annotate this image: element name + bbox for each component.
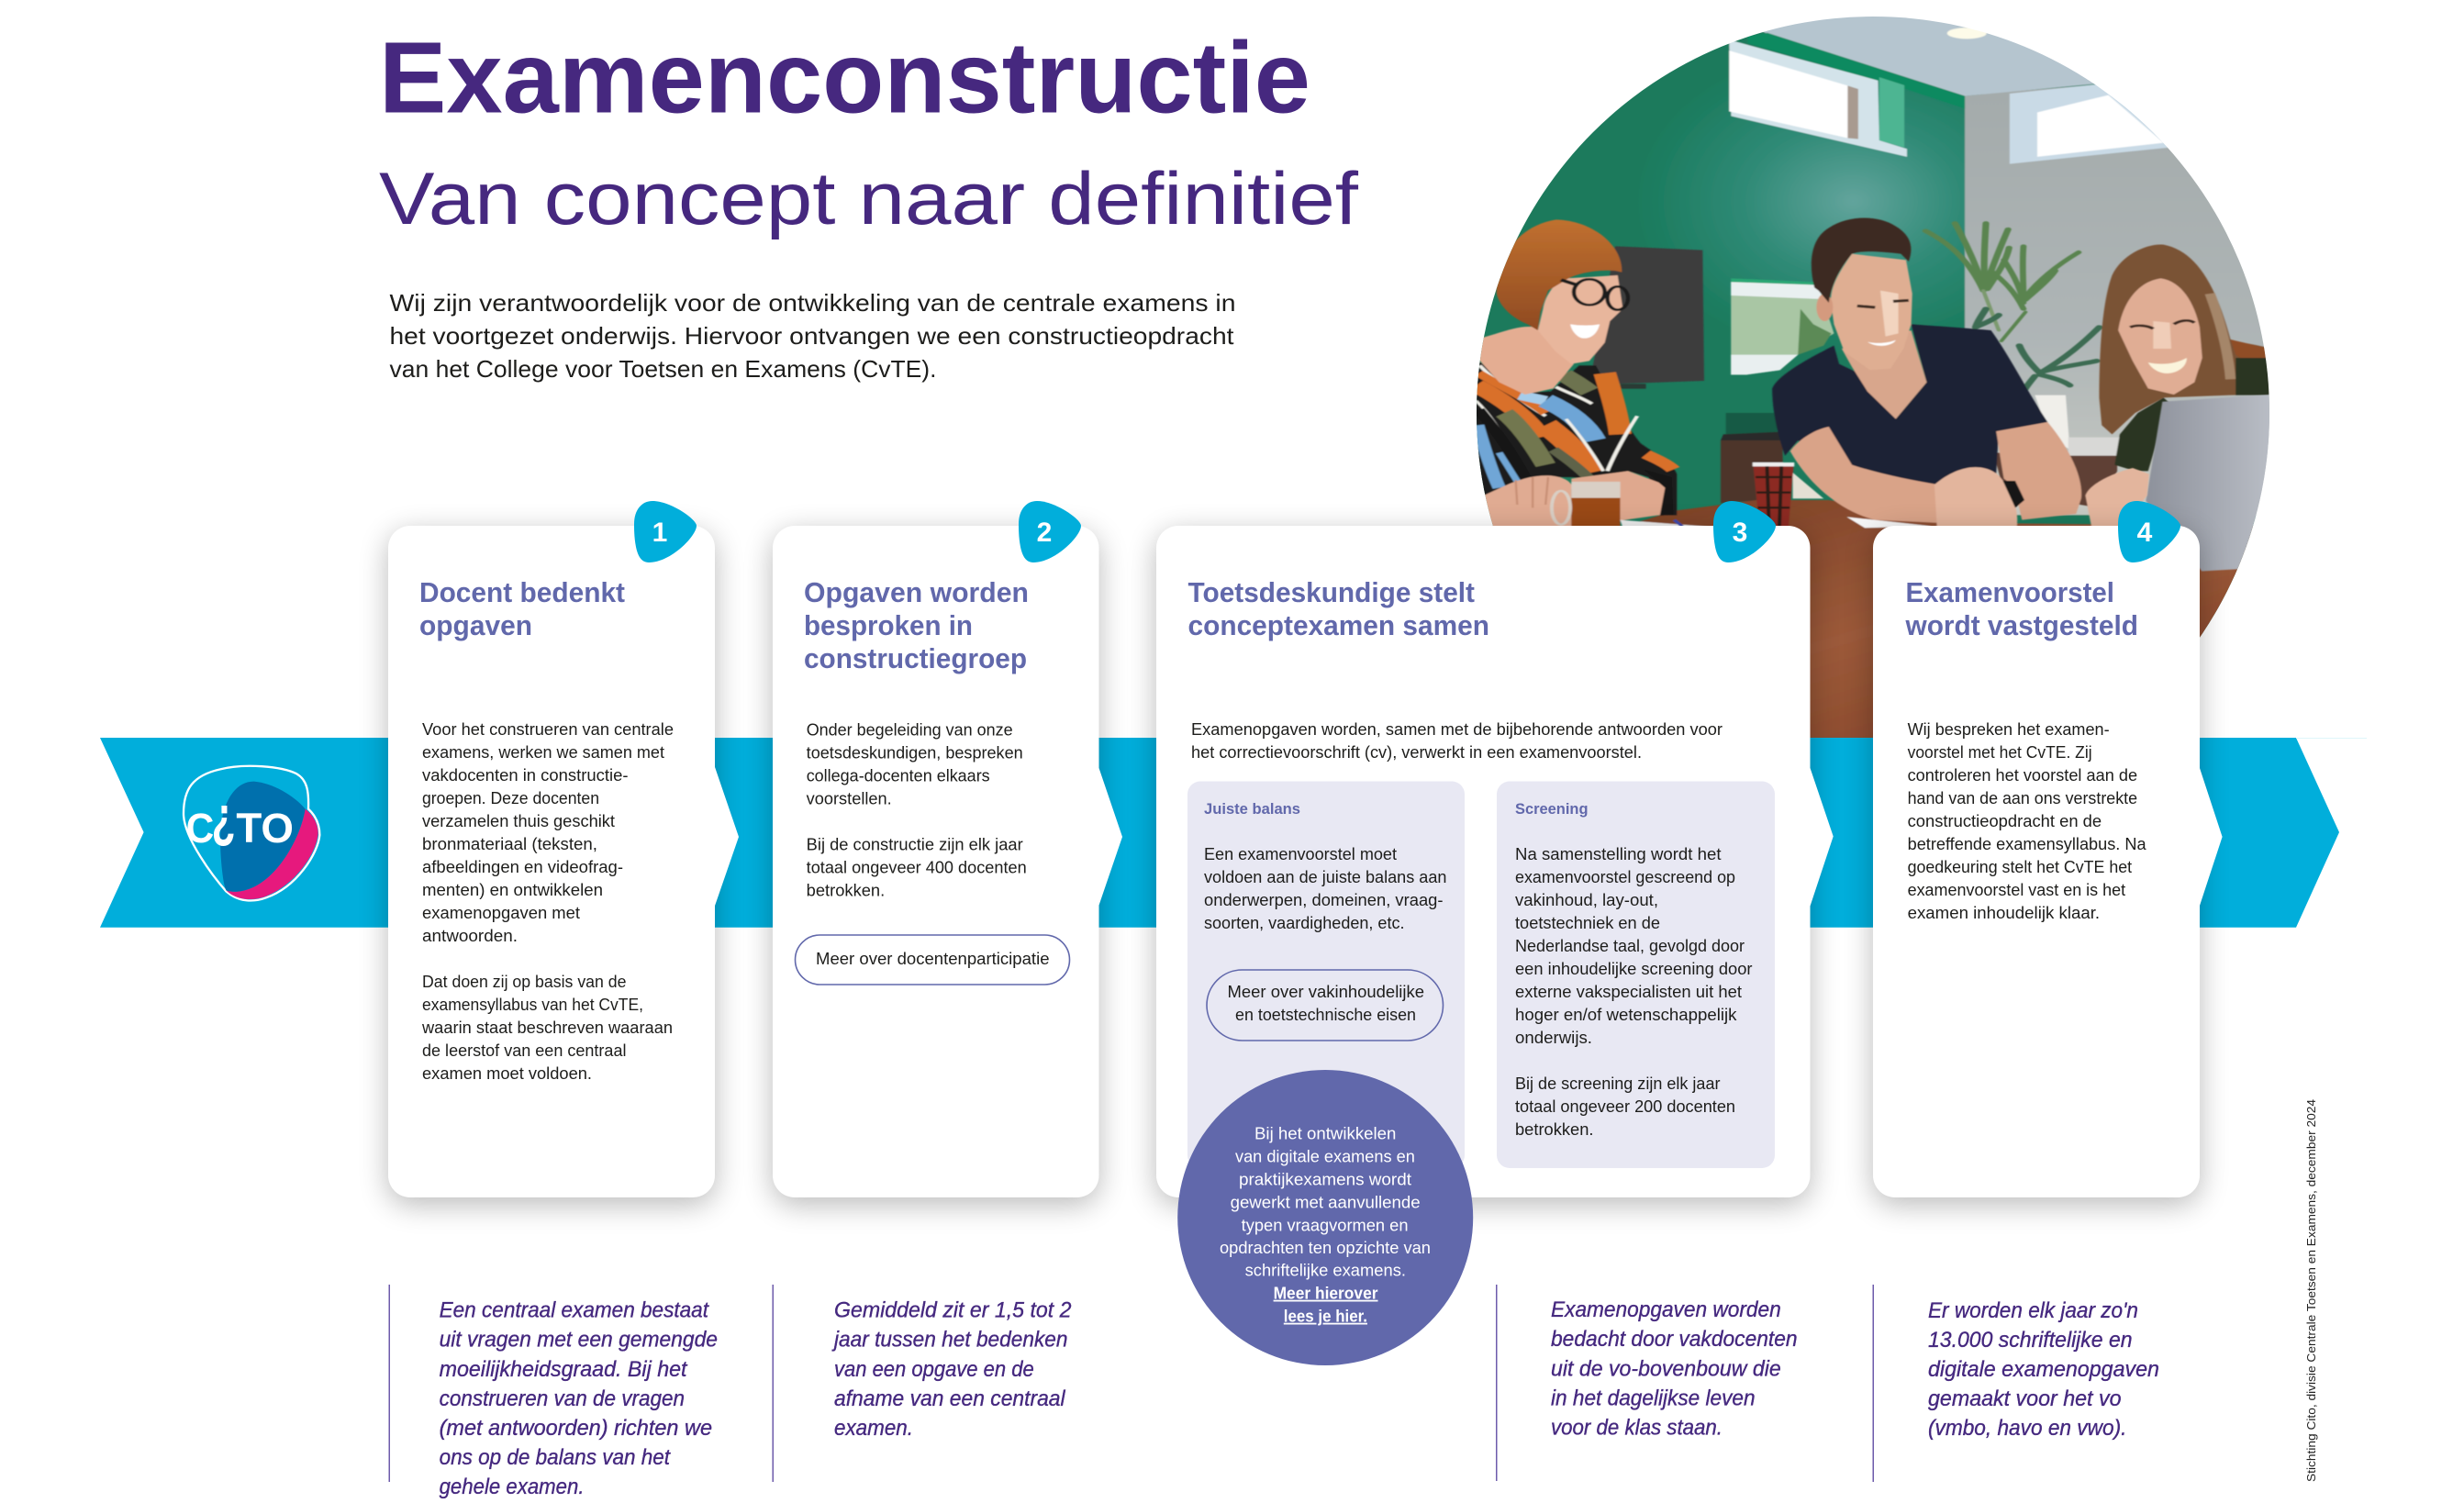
sub-panel: juiste balans: voldoen aan de juiste balans aan: [1204, 868, 1446, 886]
callout 1: een centraal examen: (met antwoorden) richten we: [440, 1416, 712, 1441]
panel: card 1, docent bedenkt opgaven: [388, 501, 739, 1205]
sub-panel: screening: Nederlandse taal, gevolgd door: [1515, 937, 1745, 955]
subtitle: Van concept naar definitief: [379, 158, 1359, 240]
callout circle: digitale examens: Bij het ontwikkelen: [1254, 1125, 1396, 1143]
button: meer over vakinhoudelijke en toetstechnische eisen: en toetstechnische eisen: [1235, 1006, 1416, 1024]
logo: Cito: ¿: [212, 785, 236, 850]
panel: card 3, toetsdeskundige stelt conceptexamen samen: [1156, 501, 1834, 1205]
callout 4: 13.000 schriftelijke en digitale examenopgaven: Er worden elk jaar zo'n: [1928, 1298, 2138, 1323]
callout 1: een centraal examen: uit vragen met een gemengde: [440, 1328, 718, 1353]
sub-panel: screening: [1497, 782, 1775, 1168]
callout circle: digitale examens: typen vraagvormen en: [1242, 1217, 1408, 1235]
heading card 1: Docent bedenkt: [419, 576, 625, 608]
body text card 1: Voor het construeren van centrale: [422, 720, 674, 739]
body text card 4: examenvoorstel vast en is het: [1908, 881, 2125, 899]
callout 3: vakdocenten vo-bovenbouw: bedacht door vakdocenten: [1551, 1327, 1798, 1352]
badge 1: 1: [652, 518, 667, 548]
callout 2: gemiddeld 1,5 tot 2 jaar: examen.: [834, 1416, 913, 1441]
callout 4: 13.000 schriftelijke en digitale examenopgaven: [1872, 1285, 2159, 1482]
callout 4: 13.000 schriftelijke en digitale examenopgaven: digitale examenopgaven: [1928, 1357, 2159, 1382]
ribbon: blue arrow band: [100, 738, 2367, 928]
heading card 3: conceptexamen samen: [1187, 609, 1489, 641]
heading card 3: Toetsdeskundige stelt: [1187, 576, 1475, 608]
body text card 1: de leerstof van een centraal: [422, 1041, 626, 1060]
panel: card 2, opgaven worden besproken: [773, 501, 1122, 1205]
intro text: Wij zijn verantwoordelijk voor de ontwikkeling van de centrale examens in: [389, 289, 1235, 317]
badge 4: 4: [2137, 518, 2153, 548]
intro text: van het College voor Toetsen en Examens (CvTE).: [389, 355, 936, 383]
callout circle: digitale examens: van digitale examens en: [1235, 1148, 1415, 1166]
body text card 4: constructieopdracht en de: [1908, 812, 2102, 830]
body text card 4: controleren het voorstel aan de: [1908, 766, 2137, 785]
body text card 1: Dat doen zij op basis van de: [422, 973, 626, 991]
body text card 2: collega-docenten elkaars: [807, 767, 990, 785]
heading card 2: constructiegroep: [804, 642, 1027, 674]
body text card 1: antwoorden.: [422, 927, 518, 945]
sub-panel: screening: externe vakspecialisten uit het: [1515, 983, 1742, 1001]
badge 2: 2: [1037, 518, 1052, 548]
callout circle: digitale examens: schriftelijke examens.: [1245, 1262, 1406, 1280]
badge 3: 3: [1733, 518, 1747, 548]
body text card 1: afbeeldingen en videofrag-: [422, 858, 623, 876]
button: meer over docentenparticipatie: Meer over docentenparticipatie: [816, 950, 1050, 968]
sub-panel: screening: hoger en/of wetenschappelijk: [1515, 1006, 1738, 1024]
callout 1: een centraal examen: [389, 1285, 718, 1499]
heading card 1: opgaven: [419, 609, 532, 641]
credit: vertical colophon: Stichting Cito, divisie Centrale Toetsen en Examens, december 2024: [2304, 1099, 2318, 1482]
sub-panel: juiste balans: Een examenvoorstel moet: [1204, 845, 1397, 863]
body text card 1: groepen. Deze docenten: [422, 789, 599, 807]
button: meer over vakinhoudelijke en toetstechnische eisen: Meer over vakinhoudelijke: [1228, 983, 1424, 1001]
body text card 2: toetsdeskundigen, bespreken: [807, 743, 1023, 762]
body text card 2: Bij de constructie zijn elk jaar: [807, 835, 1023, 853]
sub-panel: screening: een inhoudelijke screening door: [1515, 960, 1753, 978]
callout 4: 13.000 schriftelijke en digitale examenopgaven: gemaakt voor het vo: [1928, 1386, 2122, 1411]
body text card 1: vakdocenten in constructie-: [422, 766, 629, 785]
sub-panel: screening: Na samenstelling wordt het: [1515, 845, 1722, 863]
sub-panel: juiste balans: onderwerpen, domeinen, vraag-: [1204, 891, 1444, 909]
callout 3: vakdocenten vo-bovenbouw: voor de klas staan.: [1551, 1416, 1723, 1441]
heading card 2: [804, 576, 1029, 674]
heading card 4: [1905, 576, 2138, 641]
body text card 3: [1191, 720, 1723, 762]
sub-panel: juiste balans: soorten, vaardigheden, etc.: [1204, 914, 1404, 932]
body text card 2: [807, 721, 1027, 899]
heading card 4: wordt vastgesteld: [1905, 609, 2138, 641]
sub-panel: screening: Bij de screening zijn elk jaar: [1515, 1074, 1720, 1093]
callout circle: digitale examens: lees je hier.: [1284, 1308, 1367, 1326]
body text card 4: voorstel met het CvTE. Zij: [1908, 743, 2092, 762]
sub-panel: screening: onderwijs.: [1515, 1029, 1592, 1047]
body text card 4: Wij bespreken het examen-: [1908, 720, 2110, 739]
sub-panel: screening: Screening: [1515, 800, 1588, 818]
callout 2: gemiddeld 1,5 tot 2 jaar: jaar tussen het bedenken: [831, 1328, 1068, 1353]
body text card 2: totaal ongeveer 400 docenten: [807, 859, 1027, 877]
callout 4: 13.000 schriftelijke en digitale examenopgaven: 13.000 schriftelijke en: [1928, 1328, 2133, 1353]
logo: Cito: [184, 766, 319, 901]
body text card 4: hand van de aan ons verstrekte: [1908, 789, 2137, 807]
callout 4: 13.000 schriftelijke en digitale examenopgaven: (vmbo, havo en vwo).: [1928, 1416, 2126, 1441]
callout circle: digitale examens: [1177, 1070, 1473, 1365]
callout 2: gemiddeld 1,5 tot 2 jaar: Gemiddeld zit er 1,5 tot 2: [834, 1298, 1072, 1323]
intro text: het voortgezet onderwijs. Hiervoor ontvangen we een constructieopdracht: [389, 322, 1234, 350]
body text card 4: examen inhoudelijk klaar.: [1908, 904, 2100, 922]
intro text: [389, 289, 1235, 383]
callout 2: gemiddeld 1,5 tot 2 jaar: van een opgave en de: [834, 1357, 1034, 1382]
badge 3: [1713, 501, 1776, 562]
sub-panel: juiste balans: [1187, 782, 1465, 1168]
callout 1: een centraal examen: moeilijkheidsgraad. Bij het: [440, 1357, 688, 1382]
logo: Cito: C: [186, 805, 214, 852]
callout circle: digitale examens: praktijkexamens wordt: [1239, 1171, 1411, 1189]
body text card 1: examen moet voldoen.: [422, 1064, 592, 1083]
body text card 1: bronmateriaal (teksten,: [422, 835, 597, 853]
callout 2: gemiddeld 1,5 tot 2 jaar: [773, 1285, 1072, 1482]
photo: three colleagues laughing at a laptop, round crop: [1477, 17, 2269, 738]
heading card 2: besproken in: [804, 609, 973, 641]
callout 3: vakdocenten vo-bovenbouw: uit de vo-bovenbouw die: [1551, 1356, 1781, 1381]
sub-panel: juiste balans: Juiste balans: [1204, 800, 1300, 818]
body text card 1: examensyllabus van het CvTE,: [422, 996, 643, 1014]
callout circle: digitale examens: opdrachten ten opzichte van: [1220, 1239, 1431, 1257]
body text card 4: betreffende examensyllabus. Na: [1908, 835, 2147, 853]
badge 2: [1019, 501, 1081, 562]
callout 1: een centraal examen: ons op de balans van het: [440, 1445, 671, 1470]
body text card 1: verzamelen thuis geschikt: [422, 812, 615, 830]
sub-panel: screening: betrokken.: [1515, 1120, 1593, 1139]
callout 2: gemiddeld 1,5 tot 2 jaar: afname van een centraal: [834, 1386, 1065, 1411]
body text card 3: het correctievoorschrift (cv), verwerkt in een examenvoorstel.: [1191, 743, 1642, 762]
heading card 4: Examenvoorstel: [1905, 576, 2114, 608]
badge 4: [2118, 501, 2180, 562]
button: meer over docentenparticipatie: [795, 935, 1070, 985]
logo: Cito: TO: [236, 805, 294, 852]
sub-panel: screening: examenvoorstel gescreend op: [1515, 868, 1735, 886]
sub-panel: screening: vakinhoud, lay-out,: [1515, 891, 1658, 909]
callout 3: vakdocenten vo-bovenbouw: [1496, 1285, 1798, 1481]
body text card 1: [421, 720, 674, 1083]
body text card 3: Examenopgaven worden, samen met de bijbehorende antwoorden voor: [1191, 720, 1723, 739]
body text card 4: goedkeuring stelt het CvTE het: [1908, 858, 2132, 876]
heading card 1: [419, 576, 625, 641]
sub-panel: screening: totaal ongeveer 200 docenten: [1515, 1097, 1735, 1116]
panel: card 4, examenvoorstel wordt vastgesteld: [1873, 501, 2223, 1205]
body text card 1: waarin staat beschreven waaraan: [421, 1019, 673, 1037]
body text card 1: examens, werken we samen met: [422, 743, 664, 762]
body text card 1: menten) en ontwikkelen: [422, 881, 603, 899]
badge 1: [634, 501, 697, 562]
callout 3: vakdocenten vo-bovenbouw: Examenopgaven worden: [1551, 1297, 1781, 1322]
callout 3: vakdocenten vo-bovenbouw: in het dagelijkse leven: [1551, 1386, 1756, 1411]
heading card 3: [1187, 576, 1489, 641]
title: Examenconstructie: [379, 22, 1310, 134]
body text card 2: betrokken.: [807, 881, 885, 899]
body text card 4: [1908, 720, 2147, 922]
heading card 2: Opgaven worden: [804, 576, 1029, 608]
sub-panel: screening: toetstechniek en de: [1515, 914, 1660, 932]
body text card 1: examenopgaven met: [422, 904, 580, 922]
callout 1: een centraal examen: construeren van de vragen: [440, 1386, 685, 1411]
callout 1: een centraal examen: gehele examen.: [440, 1475, 584, 1499]
button: meer over vakinhoudelijke en toetstechnische eisen: [1207, 970, 1443, 1041]
callout circle: digitale examens: gewerkt met aanvullende: [1231, 1194, 1421, 1212]
body text card 2: Onder begeleiding van onze: [807, 721, 1013, 740]
callout 1: een centraal examen: Een centraal examen bestaat: [440, 1298, 709, 1323]
body text card 2: voorstellen.: [807, 789, 892, 807]
callout circle: digitale examens: Meer hierover: [1274, 1285, 1378, 1303]
